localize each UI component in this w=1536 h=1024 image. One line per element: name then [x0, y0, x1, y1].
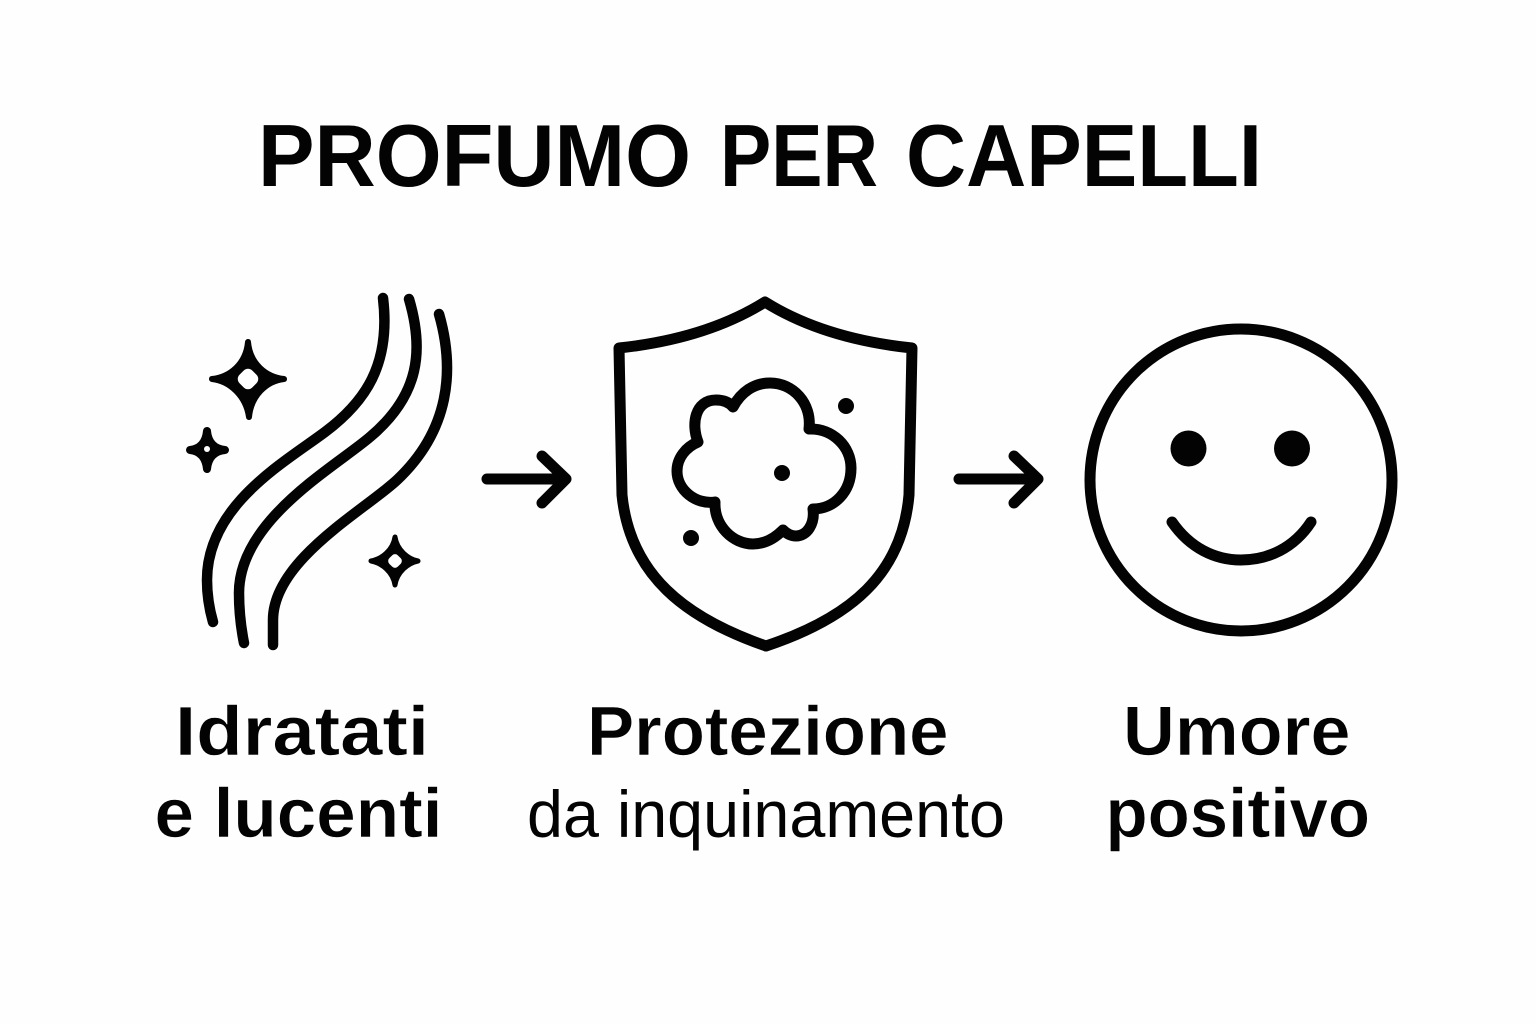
- label: protezione da inquinamento: da inquinamento: [527, 777, 1005, 851]
- label: idratati e lucenti: e lucenti: [154, 774, 442, 852]
- title: CAPELLI: [906, 106, 1262, 205]
- label: idratati e lucenti: [154, 692, 442, 852]
- arrow 2: [959, 456, 1038, 503]
- label: umore positivo: Umore: [1123, 692, 1350, 770]
- label: protezione da inquinamento: [527, 692, 1005, 851]
- label: umore positivo: [1106, 692, 1370, 852]
- icon: shield with pollution cloud: [619, 302, 912, 646]
- arrow 1: [487, 456, 566, 503]
- icon: hair strands with sparkles: [190, 298, 447, 645]
- label: idratati e lucenti: Idratati: [175, 692, 429, 770]
- icon: smiley face: [1090, 329, 1392, 631]
- title: PROFUMO: [258, 106, 691, 205]
- title: PER: [720, 106, 878, 205]
- label: protezione da inquinamento: Protezione: [587, 692, 948, 770]
- label: umore positivo: positivo: [1106, 774, 1370, 852]
- title: [258, 106, 1262, 205]
